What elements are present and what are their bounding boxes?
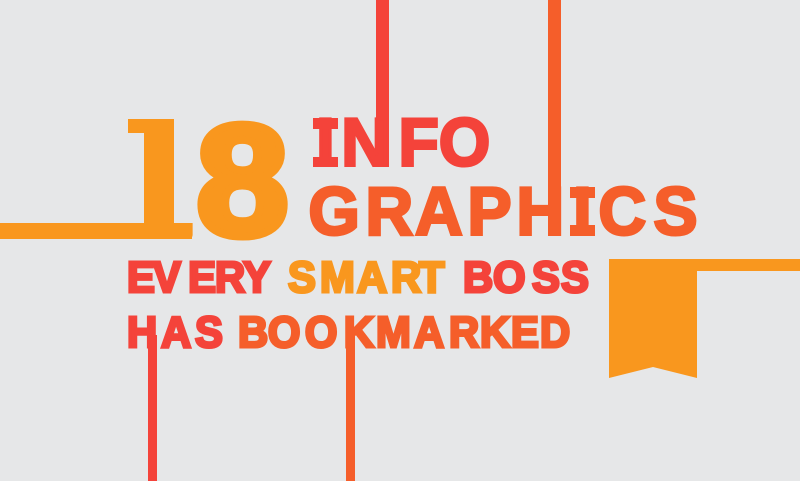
- numeral 18: [0, 93, 289, 269]
- subheading word: SMART: SMART: [288, 253, 444, 302]
- icon: bookmark ribbon with line: [609, 259, 800, 378]
- line: top orange-red: [548, 0, 561, 236]
- subheading word: HAS: HAS: [127, 308, 223, 357]
- subheading word: BOOKMARKED: BOOKMARKED: [238, 308, 570, 357]
- line: bottom red: [148, 335, 157, 481]
- numeral 18: 18: [101, 93, 289, 269]
- heading word: INFO: INFO: [316, 105, 490, 181]
- heading word: GRAPHICS: GRAPHICS: [309, 174, 697, 250]
- line: top red: [376, 0, 389, 167]
- subheading word: BOSS: BOSS: [463, 253, 589, 302]
- subheading word: EVERY: EVERY: [127, 253, 271, 302]
- line: bottom orange-red: [346, 335, 355, 481]
